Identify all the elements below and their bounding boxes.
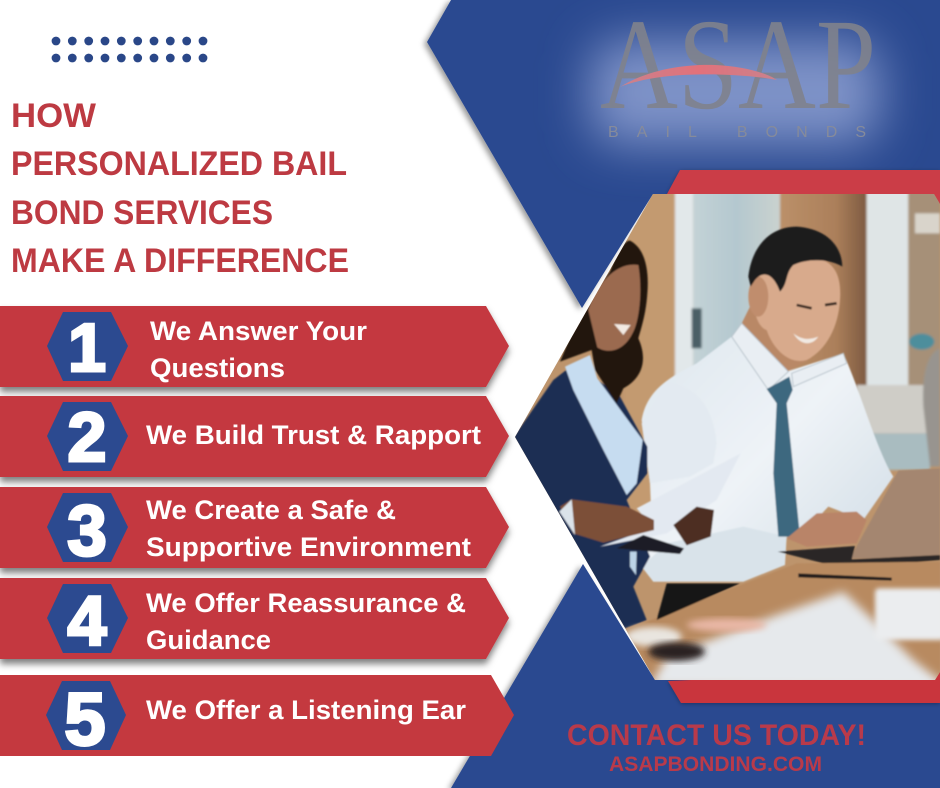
step 4 label	[146, 588, 466, 655]
step 4 label: Guidance	[146, 625, 271, 655]
step 3 label: Supportive Environment	[146, 532, 471, 562]
photo woman hands	[560, 499, 654, 543]
panel: lower blue section	[451, 564, 940, 788]
step 4 number hexagon: 4	[68, 582, 107, 660]
logo: ASAP Bail Bonds	[590, 0, 880, 145]
step 1 label: We Answer Your	[150, 316, 368, 346]
title: HOW	[11, 97, 97, 135]
photo man neck	[742, 307, 792, 371]
contact call to action	[567, 719, 866, 776]
step 5 label: We Offer a Listening Ear	[146, 695, 466, 725]
top red accent bar	[667, 170, 940, 210]
photo document	[600, 453, 741, 547]
title	[11, 97, 349, 280]
photo man hair	[748, 227, 842, 292]
photo blurred foreground	[625, 588, 940, 690]
photo man hand	[787, 512, 867, 547]
contact call to action: ASAPBONDING.COM	[609, 753, 822, 776]
photo woman blouse	[565, 355, 643, 495]
step 2 ribbon	[0, 396, 509, 477]
step 3 label: We Create a Safe &	[146, 495, 396, 525]
contact call to action: CONTACT US TODAY!	[567, 719, 866, 752]
step 3 ribbon	[0, 487, 509, 571]
step 4 number hexagon	[47, 582, 128, 660]
photo man tie	[767, 377, 800, 537]
title: PERSONALIZED BAIL	[11, 145, 347, 183]
photo man sleeve	[642, 527, 787, 582]
photo man head	[754, 257, 840, 361]
photo woman hair	[560, 241, 648, 403]
step 3 number hexagon	[47, 492, 128, 571]
step 4 ribbon	[0, 578, 509, 660]
photo people	[514, 227, 940, 680]
step 1 ribbon	[0, 306, 509, 387]
title: MAKE A DIFFERENCE	[11, 242, 349, 280]
step 1 label	[150, 316, 368, 383]
step 1 label: Questions	[150, 353, 285, 383]
photo laptop	[850, 468, 940, 558]
photo woman face	[588, 265, 640, 351]
step 1 number hexagon	[47, 310, 128, 386]
bottom red accent bar	[668, 665, 940, 703]
photo table	[625, 562, 940, 680]
step 2 label: We Build Trust & Rapport	[146, 420, 481, 450]
photo background	[623, 194, 940, 472]
step 2 number hexagon: 2	[68, 398, 106, 476]
step 4 label: We Offer Reassurance &	[146, 588, 466, 618]
step 5 number hexagon: 5	[64, 678, 106, 761]
logo glow	[590, 40, 880, 145]
panel: upper blue hexagon section	[427, 0, 940, 308]
photo man smile	[793, 333, 818, 343]
photo man collar	[732, 323, 847, 390]
step 1 number hexagon: 1	[68, 310, 106, 386]
step 3 number hexagon: 3	[67, 492, 107, 571]
logo swoosh	[620, 65, 777, 87]
step 5 ribbon	[0, 675, 514, 761]
dot pattern	[52, 37, 207, 62]
title: BOND SERVICES	[11, 194, 273, 232]
photo man trousers	[657, 583, 740, 620]
step 5 number hexagon	[46, 678, 126, 761]
photo folder	[617, 535, 684, 554]
photo: colleagues smiling at a laptop	[510, 190, 940, 690]
photo woman blazer	[514, 368, 650, 628]
photo man shirt	[640, 336, 894, 562]
logo tagline: BAIL BONDS	[608, 124, 866, 141]
step 3 label	[146, 495, 471, 562]
step 2 number hexagon	[47, 398, 128, 476]
